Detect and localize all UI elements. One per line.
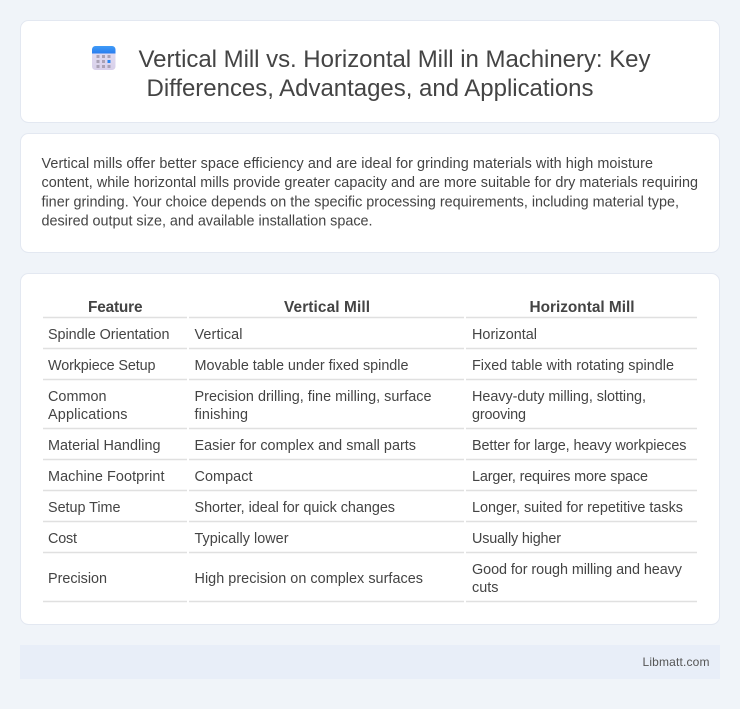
text block: summary: content, while horizontal mills provide greater capacity and are more suitable for dry materials requiring (42, 175, 698, 191)
row: precision: cuts (472, 580, 498, 596)
title: Differences, Advantages, and Applications (146, 75, 594, 102)
row: workpiece setup: Fixed table with rotating spindle (472, 358, 674, 374)
row: common applications: Common (48, 389, 106, 405)
icon: calendar (92, 46, 116, 70)
row: material handling: Better for large, heavy workpieces (472, 438, 686, 454)
row: cost: Cost (48, 531, 77, 547)
row: cost: Usually higher (472, 531, 561, 547)
text block: summary: desired output size, and available installation space. (42, 214, 372, 230)
row: spindle orientation: Horizontal (472, 327, 537, 343)
row: setup time: Setup Time (48, 500, 120, 516)
table header row (88, 299, 634, 316)
row: common applications: finishing (194, 407, 248, 423)
table header row: Vertical Mill (284, 299, 370, 316)
row: cost (48, 531, 561, 547)
text block: summary: Vertical mills offer better space efficiency and are ideal for grinding materials with high moisture (42, 156, 653, 172)
row: common applications (48, 389, 646, 423)
row: common applications: Heavy-duty milling, slotting, (472, 389, 646, 405)
row: spindle orientation: Vertical (194, 327, 242, 343)
text block: summary (42, 156, 698, 230)
row: workpiece setup: Movable table under fixed spindle (194, 358, 408, 374)
row: common applications: Applications (48, 407, 128, 423)
title (138, 46, 650, 102)
row: setup time (48, 500, 683, 516)
row: precision: High precision on complex surfaces (194, 571, 423, 587)
table header row: Horizontal Mill (530, 299, 634, 316)
row: precision (48, 562, 683, 596)
footer (20, 645, 720, 679)
row: material handling: Easier for complex and small parts (194, 438, 416, 454)
row: workpiece setup: Workpiece Setup (48, 358, 156, 374)
table header row: Feature (88, 299, 143, 316)
footer credit: Libmatt.com (642, 655, 710, 669)
row: cost: Typically lower (194, 531, 289, 547)
row: precision: Good for rough milling and heavy (472, 562, 683, 578)
row: machine footprint: Machine Footprint (48, 469, 164, 485)
row: machine footprint: Compact (194, 469, 252, 485)
title: Vertical Mill vs. Horizontal Mill in Machinery: Key (138, 46, 650, 73)
row: setup time: Longer, suited for repetitive tasks (472, 500, 683, 516)
row: material handling: Material Handling (48, 438, 160, 454)
row: precision: Precision (48, 571, 107, 587)
row: workpiece setup (48, 358, 674, 374)
row: common applications: Precision drilling, fine milling, surface (194, 389, 432, 405)
row: machine footprint: Larger, requires more space (472, 469, 648, 485)
table row lines (43, 318, 697, 602)
row: material handling (48, 438, 686, 454)
row: spindle orientation (48, 327, 537, 343)
panel: comparison table (20, 274, 720, 624)
panel: summary paragraph (20, 134, 720, 252)
panel: title header (20, 20, 720, 122)
row: setup time: Shorter, ideal for quick changes (194, 500, 395, 516)
row: common applications: grooving (472, 407, 526, 423)
text block: summary: finer grinding. Your choice depends on the specific processing requirements, including material type, (42, 194, 679, 210)
row: machine footprint (48, 469, 648, 485)
row: spindle orientation: Spindle Orientation (48, 327, 170, 343)
